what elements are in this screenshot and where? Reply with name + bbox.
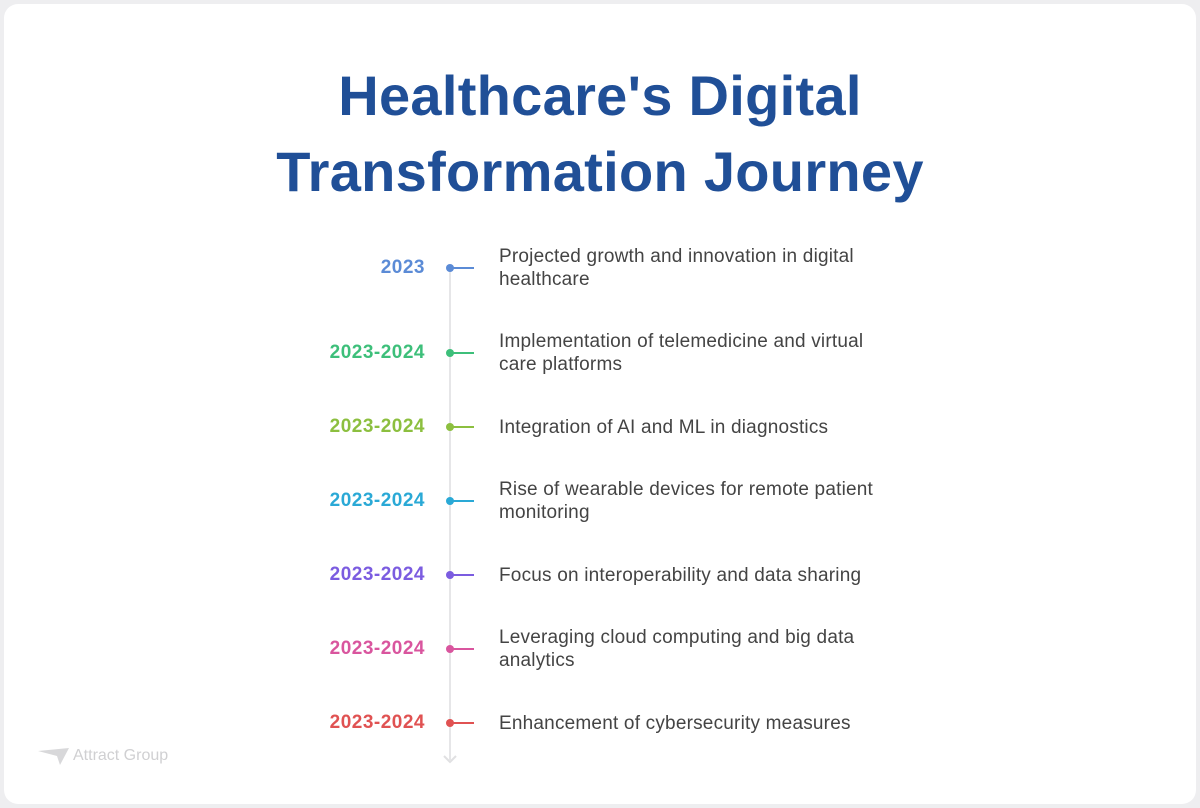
title bbox=[276, 64, 924, 203]
logo: Attract Group: Attract Group bbox=[73, 747, 168, 764]
item 2: care platforms bbox=[499, 354, 622, 375]
item 6: 2023-2024 bbox=[330, 638, 425, 659]
item 3 bbox=[330, 416, 828, 438]
item 7: 2023-2024 bbox=[330, 712, 425, 733]
item 3: 2023-2024 bbox=[330, 416, 425, 437]
timeline axis bbox=[449, 265, 451, 760]
item 7: Enhancement of cybersecurity measures bbox=[499, 713, 851, 734]
item 4: 2023-2024 bbox=[330, 490, 425, 511]
item 4: monitoring bbox=[499, 502, 590, 523]
item 7 bbox=[330, 712, 851, 734]
logo: Attract Group bbox=[38, 747, 168, 765]
item 5 bbox=[330, 564, 861, 586]
title: Transformation Journey bbox=[276, 140, 924, 203]
item 3: Integration of AI and ML in diagnostics bbox=[499, 417, 828, 438]
item 2: 2023-2024 bbox=[330, 342, 425, 363]
text: Rise of wearable devices for remote patient bbox=[499, 479, 873, 500]
item 5: Focus on interoperability and data sharing bbox=[499, 565, 861, 586]
title: Healthcare's Digital bbox=[338, 64, 862, 127]
arrow: axis end bbox=[444, 756, 456, 764]
item 6: analytics bbox=[499, 650, 575, 671]
item 1: Projected growth and innovation in digital healthcare bbox=[499, 246, 854, 290]
text: Implementation of telemedicine and virtual bbox=[499, 331, 863, 352]
item 1: 2023 bbox=[381, 257, 425, 278]
item 5: 2023-2024 bbox=[330, 564, 425, 585]
item 2 bbox=[330, 331, 863, 375]
item 4 bbox=[330, 479, 873, 523]
text: Leveraging cloud computing and big data bbox=[499, 627, 854, 648]
item 6 bbox=[330, 627, 854, 671]
